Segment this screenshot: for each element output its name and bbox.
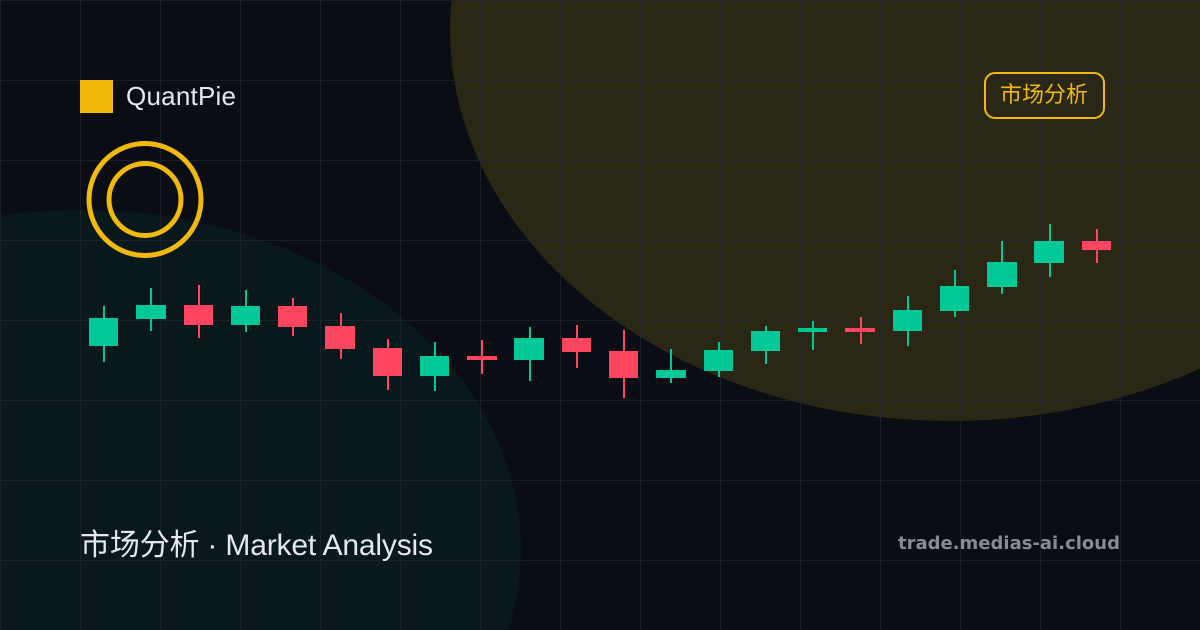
site url: trade.medias-ai.cloud: [898, 533, 1120, 554]
tag: market analysis badge: 市场分析: [1000, 82, 1088, 107]
icon: brand square: [80, 80, 113, 113]
brand name: QuantPie: [126, 81, 236, 111]
bearish candles: [184, 229, 1111, 398]
decorative yellow ellipse: [450, 0, 1200, 421]
bullish candles: [89, 224, 1064, 391]
title: 市场分析 · Market Analysis: [80, 529, 433, 562]
icon: concentric rings: [89, 144, 201, 256]
brand logo: [80, 80, 236, 113]
decorative teal ellipse: [0, 210, 521, 630]
tag: market analysis badge: [985, 73, 1104, 118]
candlestick chart: [89, 224, 1111, 398]
